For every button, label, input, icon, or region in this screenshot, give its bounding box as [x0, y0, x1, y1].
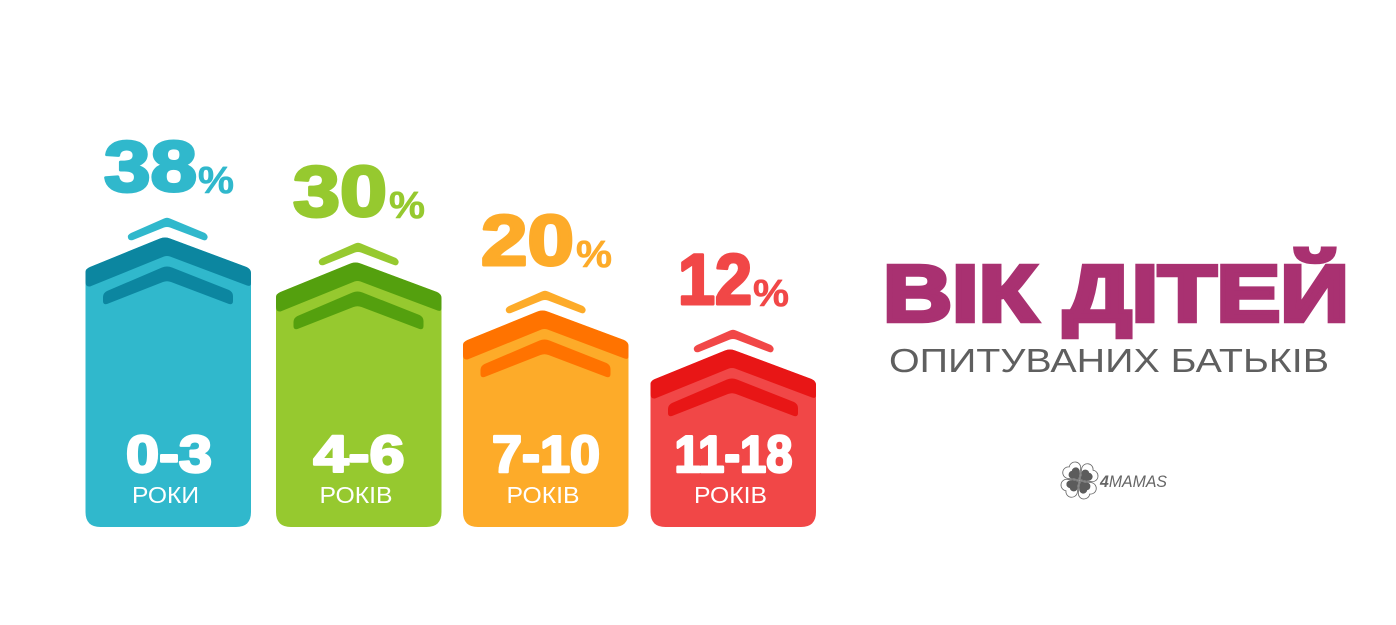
icon: chevron above column: [506, 291, 586, 313]
logo wordmark: 4MAMAS: [1099, 473, 1167, 491]
age range 7-10: 7-10: [492, 426, 600, 484]
percentage 30%: 30: [293, 153, 387, 232]
percentage 38%: 38: [104, 128, 197, 207]
title: ВІК ДІТЕЙ: [883, 248, 1349, 338]
roof band: [276, 262, 442, 312]
percentage 38%: %: [198, 160, 234, 202]
subtitle: ОПИТУВАНИХ БАТЬКІВ: [889, 343, 1329, 380]
percentage 12%: %: [753, 273, 789, 315]
percentage 30%: %: [389, 185, 425, 227]
icon: chevron above column: [694, 330, 774, 352]
inner chevron: [294, 292, 424, 329]
panel: age 7-10 column: [463, 202, 628, 527]
age range 11-18: 11-18: [674, 426, 792, 484]
icon: chevron above column: [319, 243, 399, 265]
age range 4-6: 4-6: [314, 426, 404, 484]
roof band: [650, 350, 816, 399]
panel: age 0-3 column: [86, 128, 251, 527]
column body: [86, 238, 251, 527]
unit label: РОКІВ: [694, 482, 767, 508]
inner chevron: [668, 378, 798, 416]
percentage 20%: %: [576, 234, 612, 276]
unit label: РОКІВ: [506, 482, 580, 508]
roof band: [463, 310, 628, 360]
percentage 20%: 20: [481, 202, 574, 281]
inner chevron: [103, 266, 233, 304]
panel: age 4-6 column: [276, 153, 442, 527]
unit label: РОКИ: [132, 482, 199, 508]
column body: [276, 262, 442, 527]
column body: [650, 350, 816, 527]
inner chevron: [480, 340, 610, 377]
roof band: [86, 238, 251, 287]
percentage 12%: 12: [678, 241, 752, 320]
icon: 4mamas clover logo: [1059, 460, 1167, 501]
panel: age 11-18 column: [650, 241, 816, 527]
age range 0-3: 0-3: [126, 426, 212, 484]
unit label: РОКІВ: [320, 482, 392, 508]
icon: chevron above column: [128, 218, 208, 240]
column body: [463, 310, 628, 527]
